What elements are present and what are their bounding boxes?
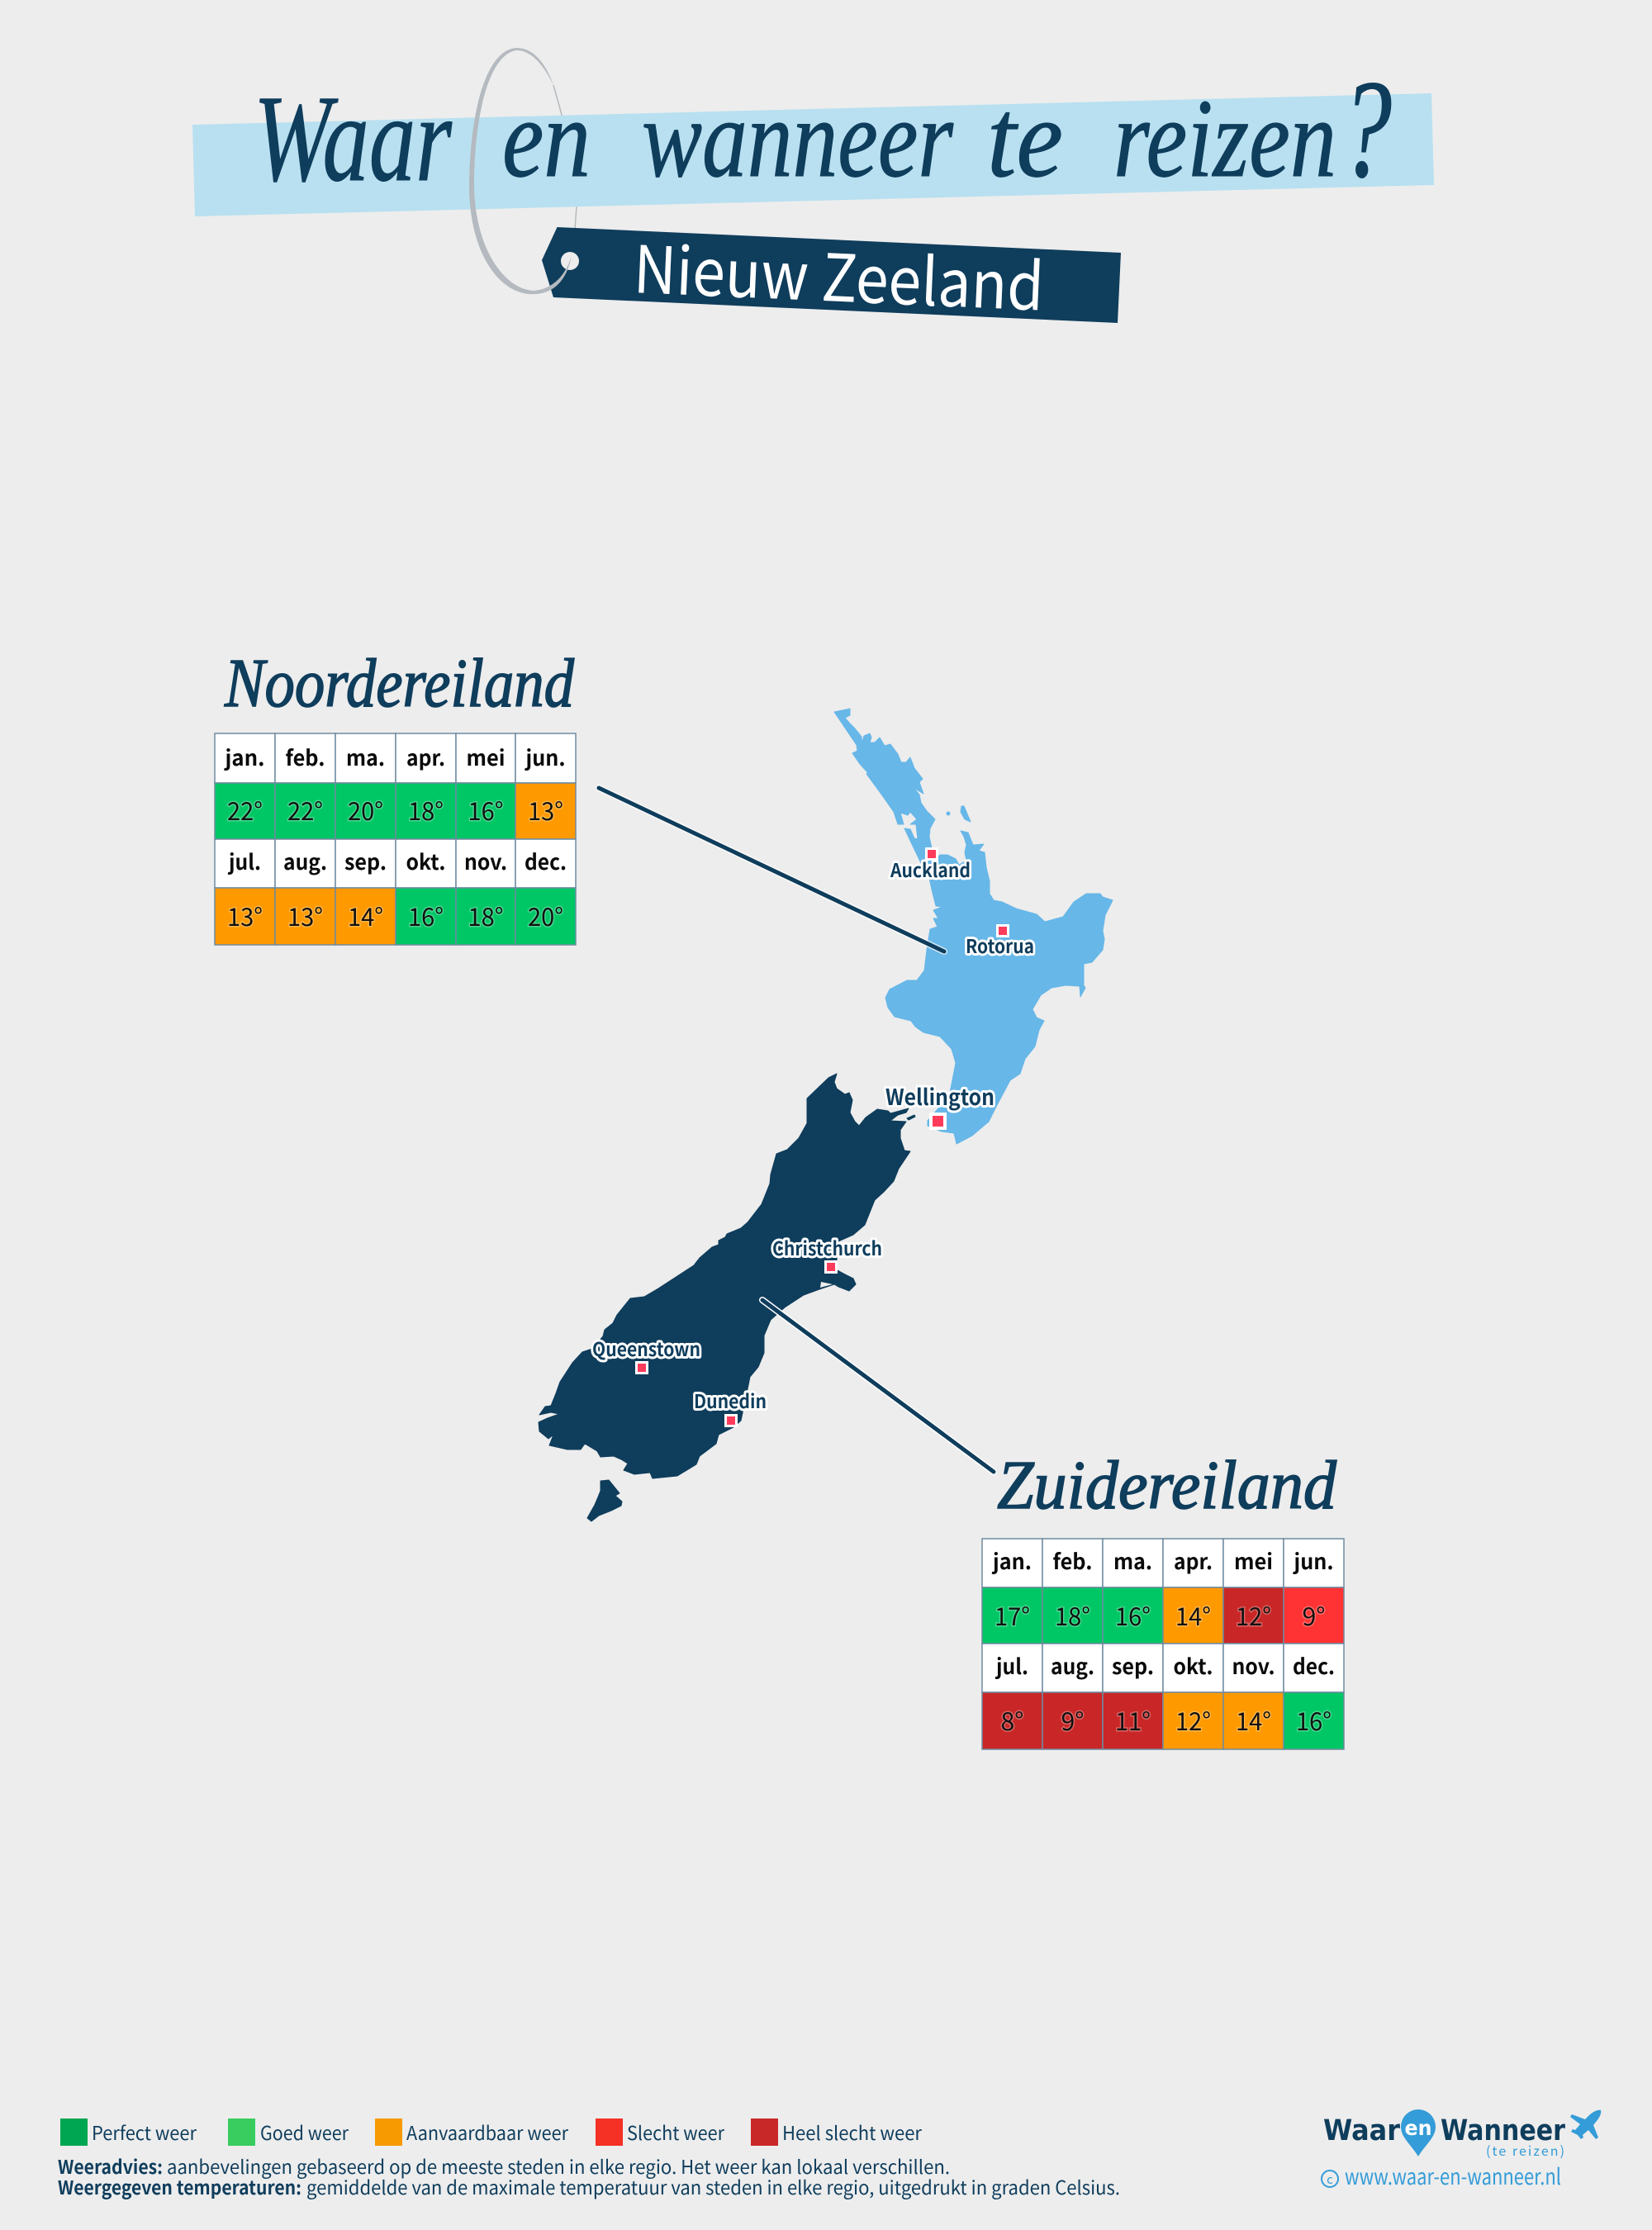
row: months jan-jun: ma. xyxy=(346,742,385,772)
copyright mark xyxy=(1322,2171,1338,2188)
legend item: Heel slecht weer: Heel slecht weer xyxy=(782,2118,922,2146)
subtitle tag xyxy=(542,216,1121,330)
row: temperatures jul-dec: 14° xyxy=(1236,1701,1271,1738)
row: months jul-dec: okt. xyxy=(406,846,446,876)
row: months jul-dec xyxy=(215,839,576,888)
row: months jul-dec: okt. xyxy=(1173,1650,1213,1681)
row: months jan-jun: jun. xyxy=(1293,1545,1333,1576)
island: Stewart Island xyxy=(587,1480,622,1521)
icon: airplane xyxy=(1570,2110,1601,2139)
row: temperatures jan-jun: 14° xyxy=(1175,1597,1211,1633)
row: months jan-jun: jun. xyxy=(525,742,565,772)
table: Noordereiland xyxy=(215,733,576,945)
city: Auckland: Auckland xyxy=(890,855,971,883)
inlet: Lake Ellesmere xyxy=(820,1282,833,1288)
island: Great Barrier xyxy=(961,806,971,822)
logo: Waar en Wanneer: Wanneer xyxy=(1441,2114,1566,2147)
row: months jul-dec xyxy=(982,1644,1344,1692)
row: months jan-jun: apr. xyxy=(406,742,445,772)
row: months jul-dec: nov. xyxy=(464,846,507,876)
row: temperatures jul-dec: 16° xyxy=(1296,1701,1332,1738)
row: temperatures jan-jun: 18° xyxy=(408,791,444,828)
table: Zuidereiland xyxy=(982,1539,1344,1749)
row: months jul-dec: dec. xyxy=(525,846,567,876)
legend item: Perfect weer: Perfect weer xyxy=(92,2118,197,2146)
title: Waar xyxy=(254,70,452,207)
row: temperatures jul-dec: 13° xyxy=(227,897,263,933)
logo: Waar en Wanneer: (te reizen) xyxy=(1486,2140,1564,2160)
title: ? xyxy=(1341,51,1392,206)
row: months jul-dec: aug. xyxy=(1051,1650,1094,1681)
row: temperatures jan-jun: 13° xyxy=(528,791,563,828)
icon: location pin xyxy=(1401,2109,1436,2156)
row: temperatures jul-dec: 16° xyxy=(408,897,444,933)
note: displayed temperatures: Weergegeven temperaturen: xyxy=(58,2172,301,2200)
row: temperatures jul-dec: 9° xyxy=(1061,1701,1084,1738)
legend item: Goed weer xyxy=(228,2118,349,2146)
row: temperatures jan-jun: 18° xyxy=(1055,1597,1090,1633)
row: months jul-dec: aug. xyxy=(283,846,327,876)
row: months jan-jun xyxy=(982,1539,1344,1587)
island: Arapaoa xyxy=(907,1115,915,1120)
row: temperatures jan-jun xyxy=(982,1587,1344,1644)
copyright mark: c xyxy=(1327,2171,1333,2188)
legend item: Goed weer: Goed weer xyxy=(260,2118,349,2146)
row: temperatures jan-jun: 22° xyxy=(287,791,323,828)
legend item: Aanvaardbaar weer: Aanvaardbaar weer xyxy=(406,2118,568,2146)
city: Queenstown: Queenstown xyxy=(592,1334,700,1362)
logo: Waar en Wanneer: en xyxy=(1404,2116,1432,2140)
row: temperatures jul-dec: 14° xyxy=(348,897,383,933)
row: temperatures jan-jun: 22° xyxy=(227,791,263,828)
row: months jul-dec: jul. xyxy=(995,1650,1028,1681)
row: months jul-dec: sep. xyxy=(344,846,387,876)
row: months jan-jun: mei xyxy=(1234,1545,1273,1576)
title: wanneer xyxy=(642,77,954,201)
row: months jan-jun xyxy=(215,733,576,783)
city: Dunedin: Dunedin xyxy=(694,1386,767,1414)
row: temperatures jan-jun: 16° xyxy=(1115,1597,1151,1633)
connector line: Noordereiland xyxy=(599,788,944,951)
city: Dunedin xyxy=(694,1386,767,1427)
row: months jul-dec: nov. xyxy=(1232,1650,1275,1681)
row: temperatures jan-jun: 12° xyxy=(1236,1597,1271,1633)
tag eyelet hole xyxy=(561,252,579,270)
city: Christchurch: Christchurch xyxy=(772,1233,882,1261)
note: displayed temperatures: gemiddelde van de maximale temperatuur van steden in elke regio, uitgedrukt in graden Celsius. xyxy=(306,2172,1120,2200)
title banner: light blue band xyxy=(192,93,1434,216)
row: temperatures jul-dec: 12° xyxy=(1175,1701,1211,1738)
row: temperatures jul-dec: 20° xyxy=(528,897,563,933)
row: months jan-jun: jan. xyxy=(991,1545,1032,1576)
row: temperatures jul-dec: 8° xyxy=(1001,1701,1024,1738)
row: months jan-jun: feb. xyxy=(286,742,325,772)
legend item: Slecht weer: Slecht weer xyxy=(627,2118,724,2146)
title xyxy=(254,51,1392,207)
legend xyxy=(60,2118,922,2146)
row: months jan-jun: apr. xyxy=(1174,1545,1213,1576)
row: months jan-jun: mei xyxy=(466,742,506,772)
row: temperatures jan-jun: 9° xyxy=(1302,1597,1325,1633)
city: Christchurch xyxy=(772,1233,882,1274)
row: temperatures jul-dec xyxy=(215,888,576,945)
heading: Zuidereiland: Zuidereiland xyxy=(997,1447,1337,1524)
city: Queenstown xyxy=(592,1334,700,1374)
heading: Noordereiland: Noordereiland xyxy=(224,645,575,722)
row: temperatures jul-dec: 11° xyxy=(1115,1701,1151,1738)
map: South Island xyxy=(539,1074,915,1521)
row: temperatures jan-jun: 17° xyxy=(995,1597,1030,1633)
row: months jul-dec: jul. xyxy=(227,846,261,876)
logo: Waar en Wanneer xyxy=(1322,2109,1601,2191)
title: te xyxy=(987,77,1063,201)
city: Wellington xyxy=(885,1079,995,1130)
row: temperatures jan-jun: 16° xyxy=(468,791,504,828)
row: temperatures jul-dec xyxy=(982,1692,1344,1749)
row: temperatures jan-jun: 20° xyxy=(348,791,383,828)
row: temperatures jan-jun xyxy=(215,783,576,839)
title: reizen xyxy=(1113,77,1336,201)
row: months jul-dec: sep. xyxy=(1112,1650,1154,1681)
tag string: back of the loop xyxy=(553,85,577,230)
row: temperatures jul-dec: 13° xyxy=(287,897,323,933)
logo: Waar en Wanneer: Waar xyxy=(1323,2114,1401,2147)
city: Wellington: Wellington xyxy=(885,1079,995,1112)
subtitle text: Nieuw Zeeland xyxy=(632,216,1047,330)
note: weather advice: aanbevelingen gebaseerd op de meeste steden in elke regio. Het weer kan lokaal verschillen. xyxy=(167,2152,950,2180)
website url: www.waar-en-wanneer.nl xyxy=(1345,2159,1561,2191)
row: months jul-dec: dec. xyxy=(1293,1650,1335,1681)
row: months jan-jun: jan. xyxy=(224,742,264,772)
row: months jan-jun: feb. xyxy=(1052,1545,1092,1576)
row: temperatures jul-dec: 18° xyxy=(468,897,504,933)
row: months jan-jun: ma. xyxy=(1113,1545,1152,1576)
map: North Island xyxy=(834,709,1113,1144)
tag string: front of the loop xyxy=(469,48,572,294)
island: Little Barrier xyxy=(947,812,950,815)
city: Rotorua: Rotorua xyxy=(966,931,1034,959)
note: weather advice: Weeradvies: xyxy=(58,2152,163,2180)
title: en xyxy=(502,77,591,201)
connector line: Zuidereiland xyxy=(762,1300,994,1472)
